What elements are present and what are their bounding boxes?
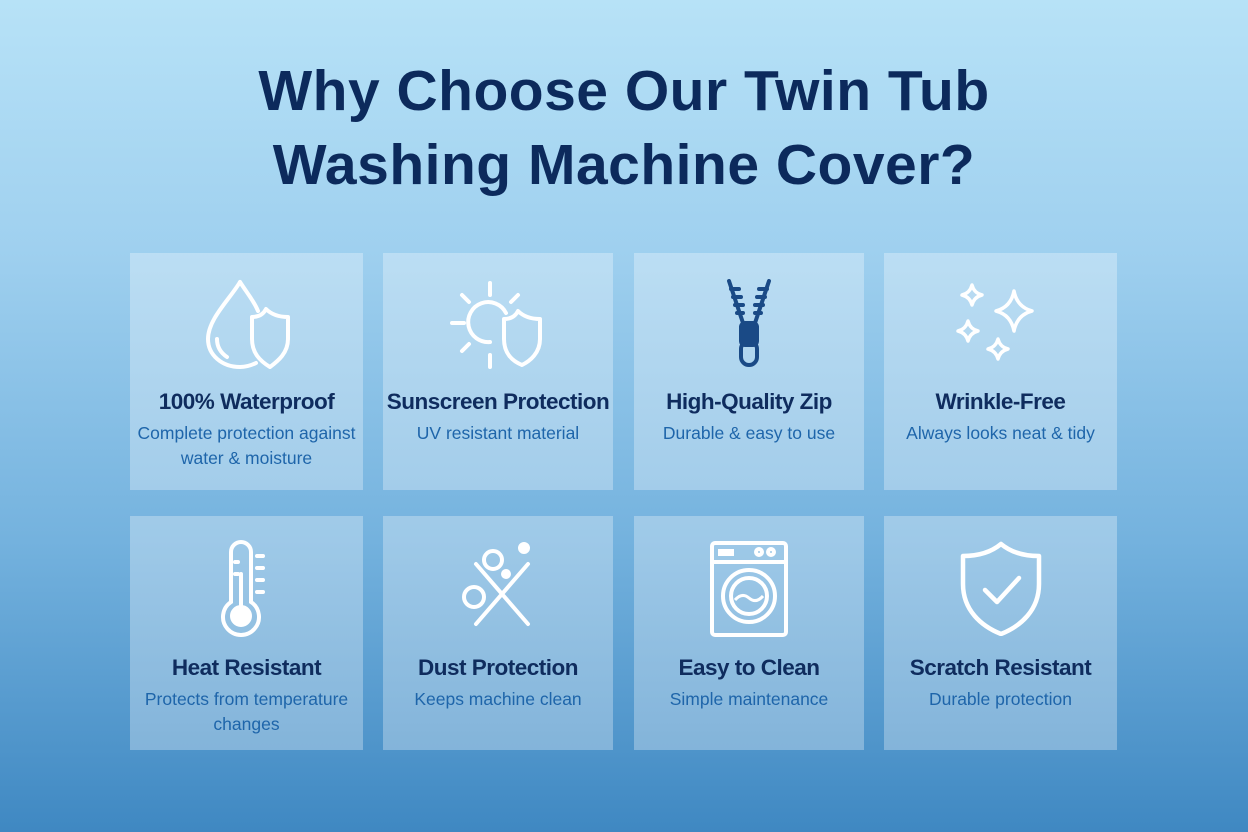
panel: waterproof <box>130 253 363 490</box>
description: Keeps machine clean <box>414 689 582 709</box>
heading: Scratch Resistant <box>910 655 1091 680</box>
description: Durable protection <box>929 689 1072 709</box>
icon: shield check <box>960 542 1042 636</box>
title: Washing Machine Cover? <box>273 133 975 197</box>
description: Protects from temperature changes <box>145 689 348 734</box>
heading: Easy to Clean <box>678 655 820 680</box>
icon: washing machine <box>710 541 788 637</box>
title <box>258 59 990 197</box>
panel: sunscreen <box>383 253 613 490</box>
panel: zip <box>634 253 864 490</box>
icon: sun with shield <box>450 281 542 369</box>
panel: scratch resistant <box>884 516 1117 750</box>
panel: wrinkle-free <box>884 253 1117 490</box>
icon: thermometer <box>221 540 265 637</box>
icon: dust particles crossed <box>462 542 530 626</box>
icon: sparkles <box>956 283 1034 361</box>
description: Simple maintenance <box>670 689 828 709</box>
description: Complete protection against water & moisture <box>138 423 355 468</box>
icon: water drop with shield <box>206 280 290 369</box>
heading: High-Quality Zip <box>666 389 832 414</box>
heading: Wrinkle-Free <box>936 389 1065 414</box>
heading: Dust Protection <box>418 655 578 680</box>
title: Why Choose Our Twin Tub <box>258 59 990 123</box>
panel: heat <box>130 516 363 750</box>
heading: Heat Resistant <box>172 655 321 680</box>
panel: dust <box>383 516 613 750</box>
icon: zipper <box>726 279 772 367</box>
description: UV resistant material <box>417 423 579 443</box>
description: Durable & easy to use <box>663 423 835 443</box>
heading: 100% Waterproof <box>159 389 334 414</box>
description: Always looks neat & tidy <box>906 423 1095 443</box>
panel: easy to clean <box>634 516 864 750</box>
heading: Sunscreen Protection <box>387 389 609 414</box>
